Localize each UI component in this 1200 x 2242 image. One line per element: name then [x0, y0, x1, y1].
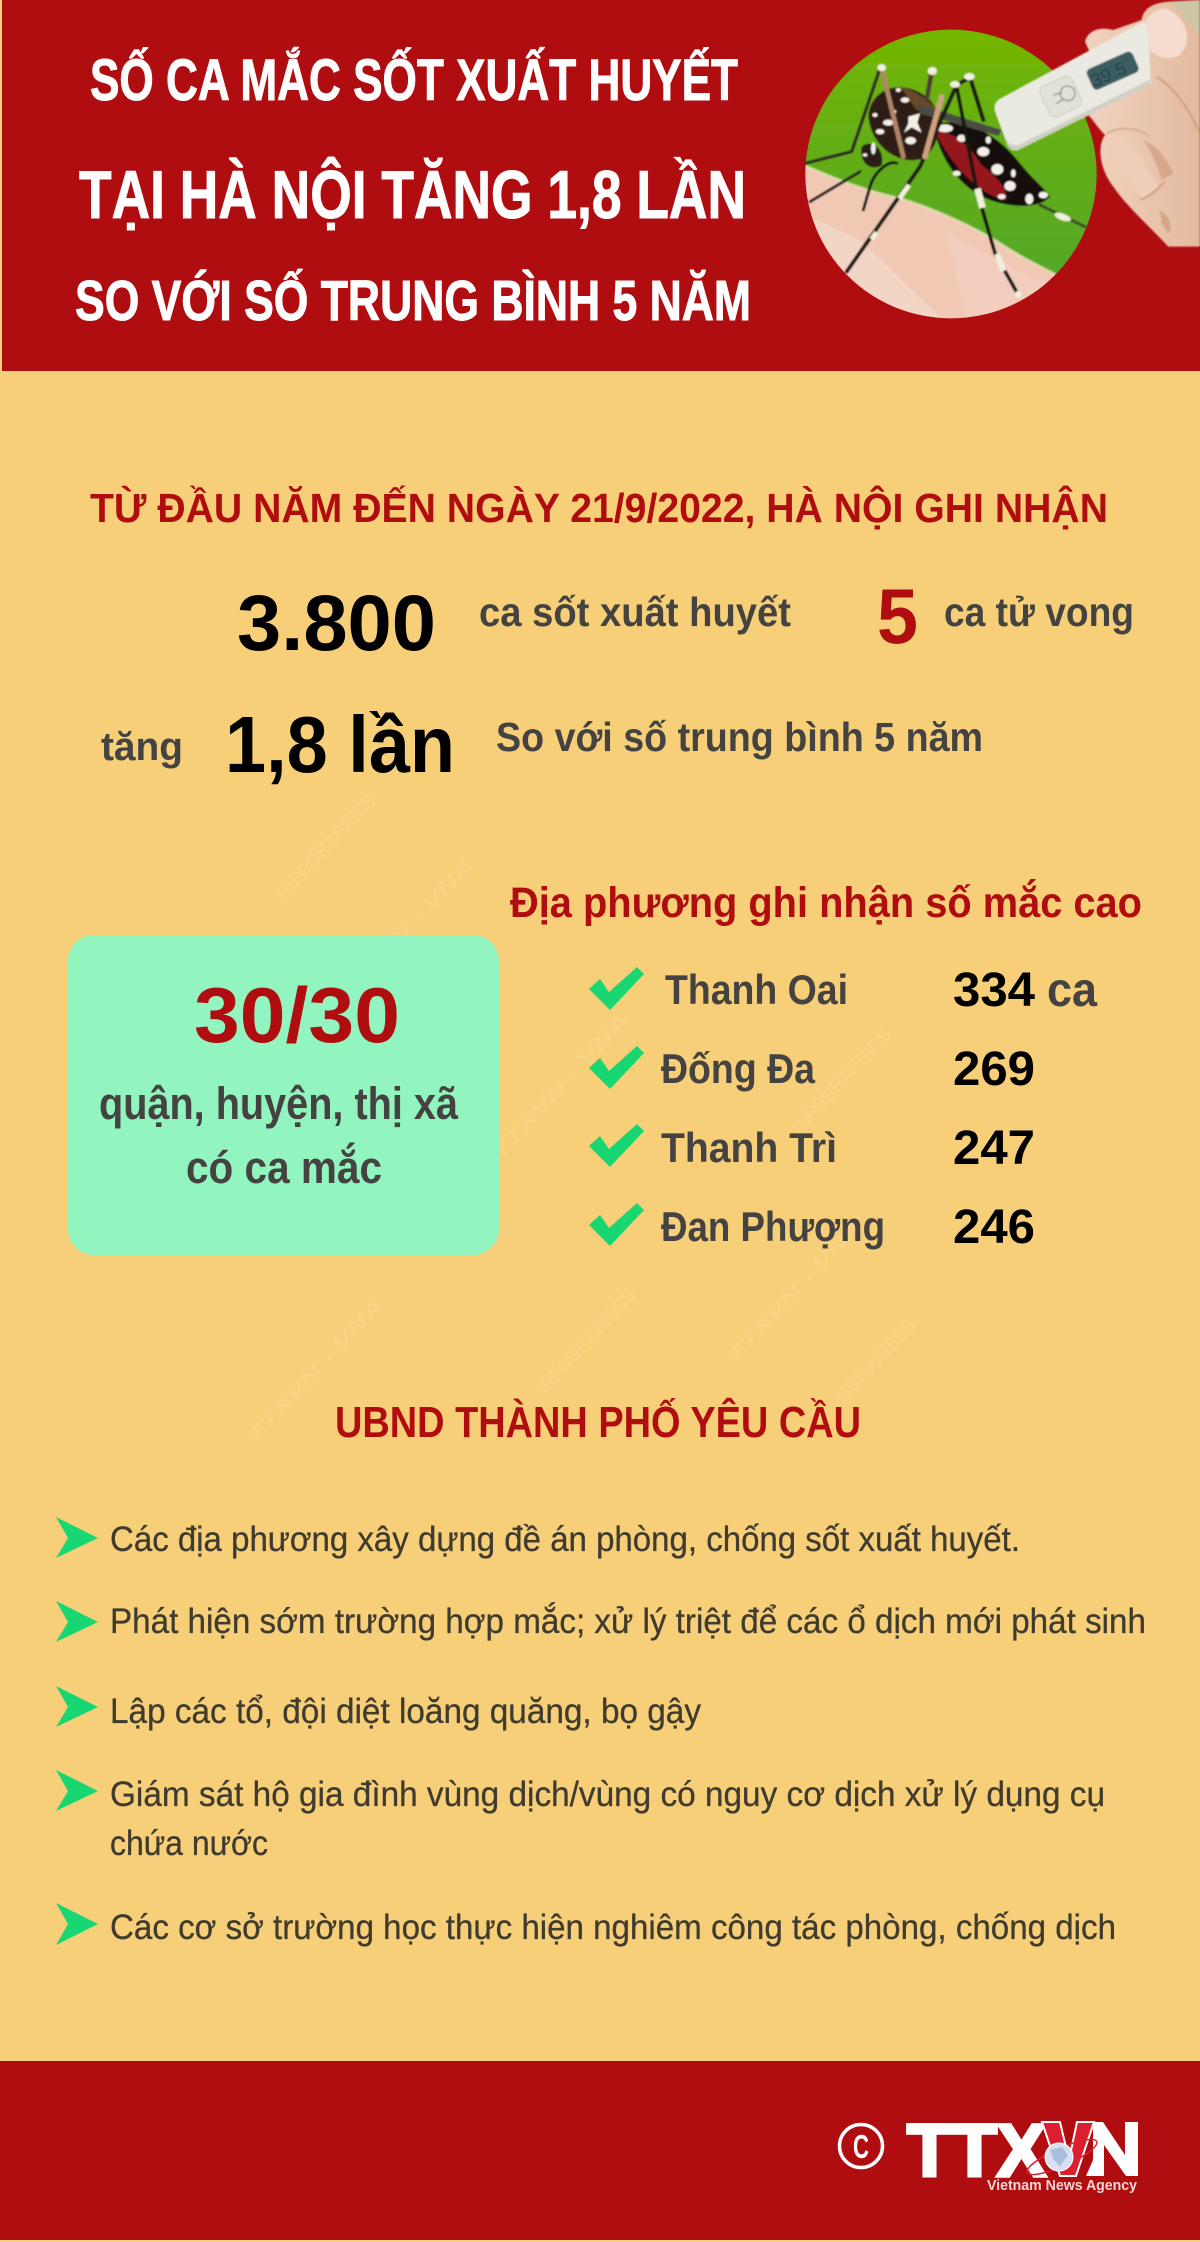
stat: 5 deaths: ca tử vong: [944, 589, 1134, 635]
row: Thanh Trì: [589, 1122, 1035, 1175]
text: TTXVN - VNA: [243, 1294, 388, 1448]
panel: 30/30 districts: [68, 935, 499, 1255]
header band: [2, 0, 1200, 371]
title: SỐ CA MẮC SỐT XUẤT HUYẾT: [90, 48, 738, 113]
footer band: [0, 2061, 1200, 2240]
stat: 1,8 times increase: tăng: [101, 725, 183, 769]
stat: 1,8 times increase: [101, 700, 983, 789]
row: Đan Phượng: 246: [953, 1201, 1035, 1254]
bullet 1: Các địa phương xây dựng đề án phòng, chống sốt xuất huyết.: [110, 1520, 1020, 1559]
logo: TTXVN: [907, 2109, 1138, 2194]
text: INFOGRAPHICS: [788, 1025, 896, 1138]
row: Đan Phượng: Đan Phượng: [661, 1203, 885, 1250]
thorax: [868, 87, 939, 160]
photo: mosquito with thermometer: [803, 0, 1200, 323]
row: Thanh Oai: Thanh Oai: [665, 966, 848, 1013]
bullet 3: Lập các tổ, đội diệt loăng quăng, bọ gậy: [110, 1692, 701, 1731]
stat: 3.800 cases: 3.800: [237, 578, 436, 667]
icon: copyright: C: [853, 2128, 869, 2165]
title: SO VỚI SỐ TRUNG BÌNH 5 NĂM: [75, 268, 751, 333]
row: Thanh Oai: ca: [1047, 964, 1097, 1017]
row: Đống Đa: Đống Đa: [661, 1045, 816, 1092]
list: requests: [56, 1517, 1146, 1947]
text: TTXVN - VNA: [488, 1009, 633, 1163]
row: Thanh Oai: [589, 964, 1097, 1017]
legs: [805, 68, 1085, 295]
icon: copyright: [840, 2124, 882, 2168]
row: Thanh Oai: 334: [953, 964, 1035, 1017]
text: TTXVN - VNA: [333, 854, 478, 1008]
logo: TTXVN: Vietnam News Agency: [987, 2177, 1138, 2194]
logo: TTXVN: TTX: [907, 2109, 1046, 2192]
row: Đống Đa: 269: [953, 1043, 1035, 1096]
title: [75, 48, 751, 333]
row: Đan Phượng: [589, 1201, 1035, 1254]
heading: localities with high case counts: Địa phương ghi nhận số mắc cao: [510, 878, 1142, 927]
section heading: recorded cases: TỪ ĐẦU NĂM ĐẾN NGÀY 21/9/2022, HÀ NỘI GHI NHẬN: [90, 485, 1108, 531]
panel: 30/30 districts: có ca mắc: [186, 1142, 382, 1193]
hand: [1085, 0, 1200, 247]
heading: city requests: UBND THÀNH PHỐ YÊU CẦU: [335, 1396, 861, 1447]
panel: 30/30 districts: 30/30: [194, 971, 400, 1059]
bullet 4: chứa nước: [110, 1824, 268, 1863]
list: localities: [589, 964, 1097, 1254]
bullet 2: Phát hiện sớm trường hợp mắc; xử lý triệt để các ổ dịch mới phát sinh: [110, 1602, 1146, 1641]
stat: 1,8 times increase: 1,8 lần: [225, 700, 455, 789]
stat: 3.800 cases: ca sốt xuất huyết: [479, 589, 791, 635]
title: TẠI HÀ NỘI TĂNG 1,8 LẦN: [79, 156, 746, 233]
thermometer: [994, 22, 1150, 150]
abdomen: [933, 122, 1050, 206]
stat: 5 deaths: 5: [877, 572, 918, 660]
stat: 3.800 cases: [237, 578, 791, 667]
text: INFOGRAPHICS: [813, 1315, 921, 1428]
stat: 5 deaths: [877, 572, 1134, 660]
row: Thanh Trì: Thanh Trì: [661, 1124, 837, 1171]
text: INFOGRAPHICS: [533, 1285, 641, 1398]
stat: 1,8 times increase: So với số trung bình 5 năm: [496, 714, 983, 760]
text: INFOGRAPHICS: [273, 790, 381, 903]
row: Thanh Trì: 247: [953, 1122, 1035, 1175]
bullet 4: [56, 1770, 1105, 1863]
row: Đống Đa: [589, 1043, 1035, 1096]
bullet 5: Các cơ sở trường học thực hiện nghiêm công tác phòng, chống dịch: [110, 1908, 1116, 1947]
photo: mosquito with thermometer: 39.5: [1088, 58, 1129, 91]
bullet 4: Giám sát hộ gia đình vùng dịch/vùng có nguy cơ dịch xử lý dụng cụ: [110, 1775, 1105, 1814]
panel: 30/30 districts: quận, huyện, thị xã: [99, 1078, 459, 1129]
text: TTXVN - VNA: [723, 1214, 868, 1368]
